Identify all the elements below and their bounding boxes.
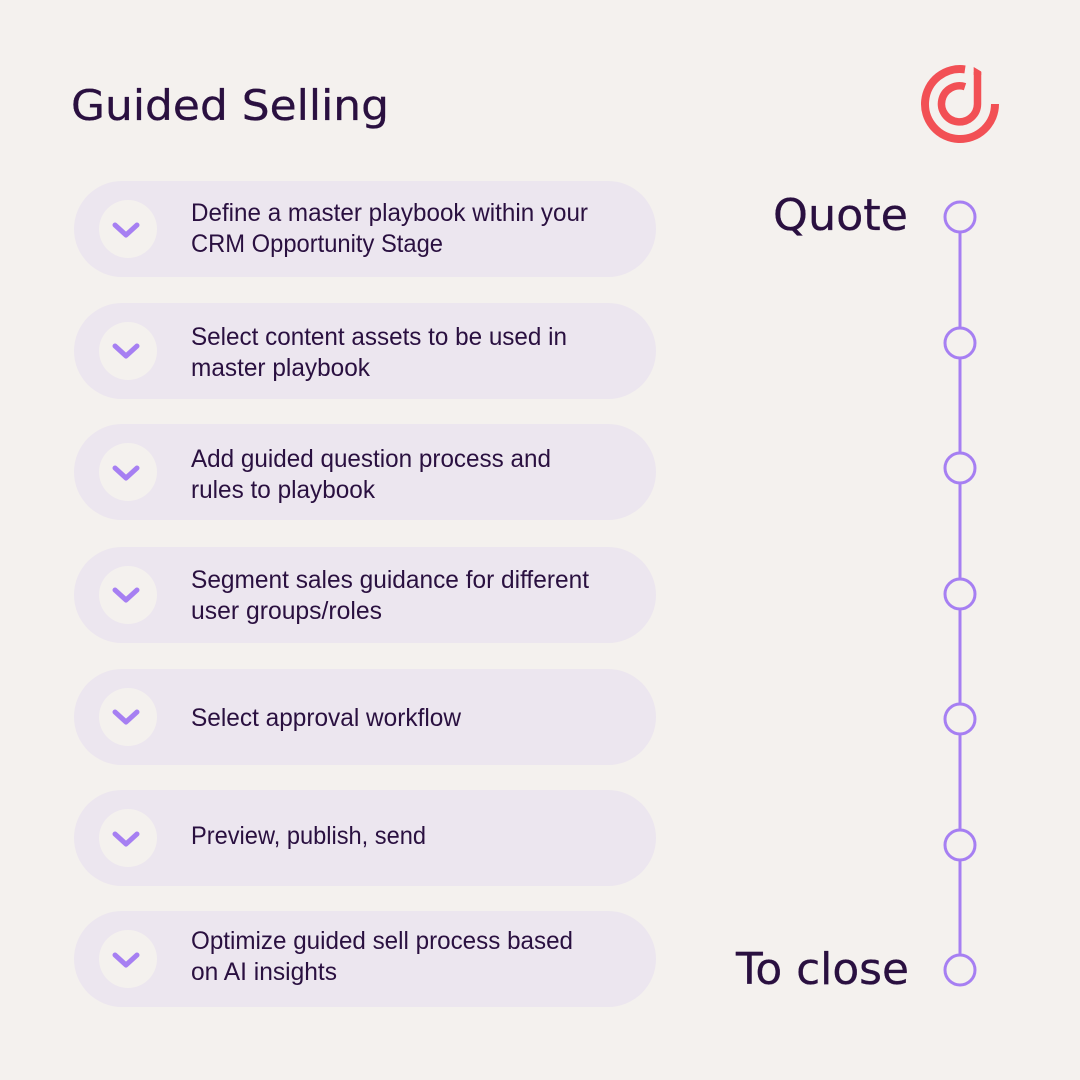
step 1: [74, 181, 656, 277]
timeline label: Quote: Quote: [773, 190, 908, 241]
timeline: [945, 202, 975, 985]
step 7: [74, 911, 656, 1007]
step 5: [74, 669, 656, 765]
step 7: Optimize guided sell process based: [191, 927, 573, 955]
title: Guided Selling: [71, 81, 389, 130]
step 1: CRM Opportunity Stage: [191, 230, 443, 258]
step 4: [74, 547, 656, 643]
step 3: Add guided question process and: [191, 445, 551, 473]
step 2: [74, 303, 656, 399]
step 4: user groups/roles: [191, 597, 382, 625]
step 4: Segment sales guidance for different: [191, 566, 589, 594]
step 3: rules to playbook: [191, 476, 375, 504]
step 2: master playbook: [191, 354, 370, 382]
step 5: Select approval workflow: [191, 704, 462, 732]
step 3: [74, 424, 656, 520]
step 1: Define a master playbook within your: [191, 199, 588, 227]
icon: logo: [925, 67, 995, 139]
panel: steps list: [74, 181, 656, 1007]
step 7: on AI insights: [191, 958, 337, 986]
step 2: Select content assets to be used in: [191, 323, 567, 351]
step 6: Preview, publish, send: [191, 822, 426, 850]
step 6: [74, 790, 656, 886]
timeline label: To close: To close: [735, 944, 909, 995]
